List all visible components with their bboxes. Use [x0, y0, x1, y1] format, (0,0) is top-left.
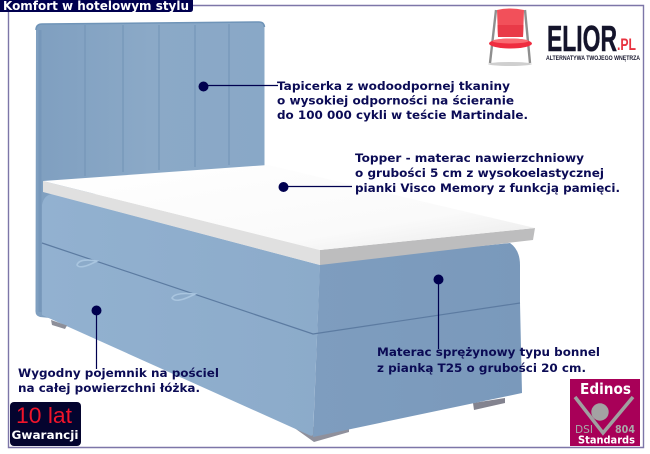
drawer handle right [172, 294, 195, 300]
badge: Edinos standards: DSI [575, 423, 593, 436]
callout: topper [278, 151, 620, 195]
front foot [293, 426, 349, 442]
callout text: Topper - materac nawierzchniowy [355, 151, 585, 165]
badge: 10 year warranty [10, 402, 81, 446]
marker [278, 182, 352, 192]
badge: 10 year warranty: Gwarancji [12, 428, 78, 442]
callout: upholstery: do 100 000 cykli w teście Martindale. [277, 108, 528, 122]
badge: Edinos standards: Edinos [580, 380, 631, 398]
base side panel [313, 243, 522, 437]
logo domain: .PL [617, 35, 636, 54]
base front panel [42, 194, 320, 436]
badge: Edinos standards: 804 [615, 423, 635, 436]
callout text: Wygodny pojemnik na pościel [18, 366, 219, 380]
badge: Edinos standards [570, 379, 640, 446]
callout text: Materac sprężynowy typu bonnel [377, 345, 600, 359]
left foot [51, 320, 67, 329]
topper mattress [43, 165, 535, 265]
bed illustration [35, 22, 535, 442]
badge: 10 year warranty: 10 lat [16, 403, 72, 428]
drawer seam [42, 243, 520, 334]
drawer handle left [77, 260, 97, 267]
right foot [473, 398, 505, 410]
callout: topper: o grubości 5 cm z wysokoelastycznej [355, 166, 604, 180]
callout: storage [18, 306, 219, 395]
marker [92, 306, 102, 369]
callout: mattress: z pianką T25 o grubości 20 cm. [377, 361, 586, 375]
callout: mattress [377, 274, 600, 375]
callout: upholstery: o wysokiej odporności na ścieranie [277, 94, 514, 108]
icon: red chair [488, 8, 532, 66]
callout: upholstery [198, 79, 528, 122]
callout: storage: na całej powierzchni łóżka. [18, 381, 200, 395]
headboard [35, 22, 264, 318]
logo: Elior.pl [488, 8, 640, 66]
callout: topper: pianki Visco Memory z funkcją pamięci. [355, 181, 620, 195]
callout text: Tapicerka z wodoodpornej tkaniny [277, 79, 511, 93]
marker [198, 82, 278, 92]
marker [434, 274, 444, 349]
badge: Edinos standards: Standards [578, 434, 635, 446]
